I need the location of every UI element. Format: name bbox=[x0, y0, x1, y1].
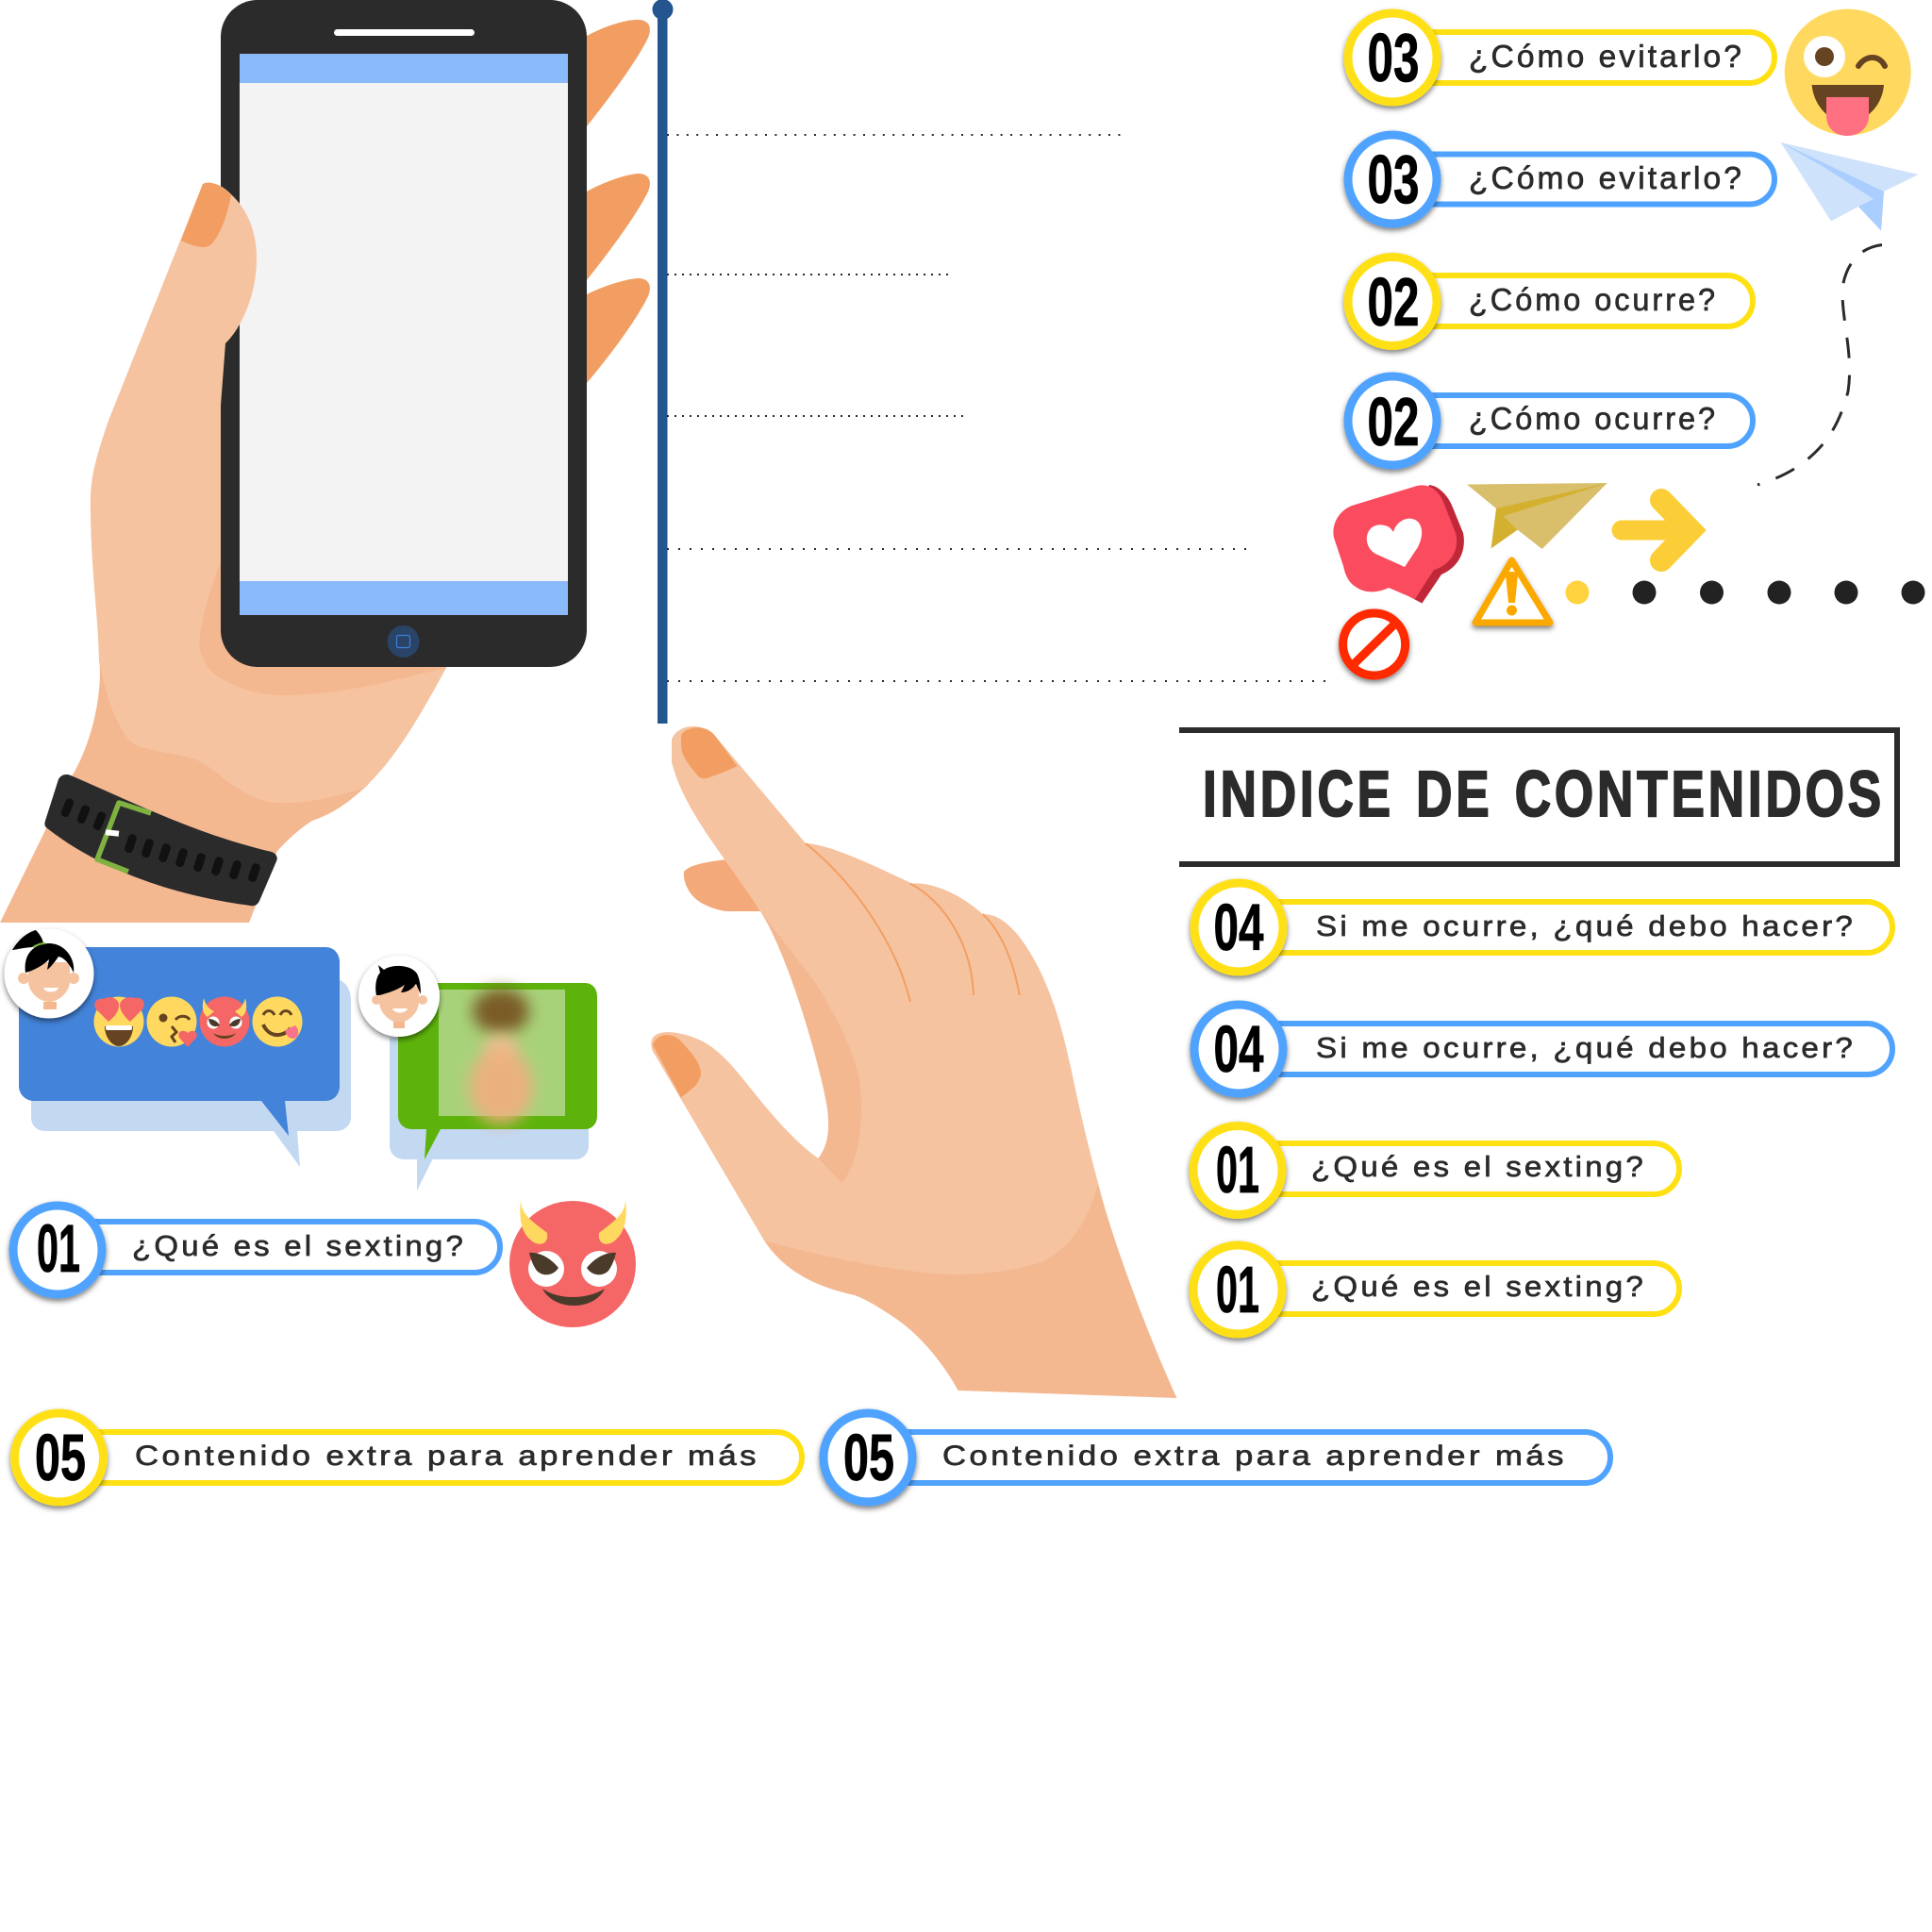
pill: 03 yellow: 03 bbox=[1368, 21, 1419, 96]
pill: 01 yellow second: 01 bbox=[1216, 1253, 1259, 1326]
pill: 01 yellow: 01 bbox=[1216, 1133, 1259, 1207]
chat: woman message bubble bbox=[4, 928, 351, 1167]
pill: 05 yellow bbox=[15, 1413, 802, 1502]
dotted leader lines bbox=[667, 135, 1333, 681]
pill: 03 yellow: ¿Cómo evitarlo? bbox=[1469, 39, 1744, 74]
pill: 01 blue bbox=[13, 1206, 500, 1294]
pill: 04 yellow: 04 bbox=[1213, 891, 1264, 964]
smartphone bbox=[221, 0, 587, 667]
photo blurred bbox=[439, 989, 565, 1124]
icon: yellow arrow bbox=[1622, 500, 1690, 560]
pill: 02 blue: ¿Cómo ocurre? bbox=[1469, 401, 1718, 436]
pill: 01 yellow second: ¿Qué es el sexting? bbox=[1311, 1270, 1646, 1303]
pill: 03 yellow bbox=[1348, 13, 1774, 102]
avatar: woman bbox=[4, 928, 94, 1019]
wristband tab bbox=[106, 829, 119, 837]
emoji: tongue smile bbox=[253, 996, 302, 1047]
index nail bbox=[681, 727, 737, 778]
title box bbox=[1179, 730, 1897, 864]
pill: 02 blue bbox=[1348, 376, 1753, 465]
phone home button bbox=[387, 625, 419, 658]
pill: 03 blue: ¿Cómo evitarlo? bbox=[1469, 160, 1744, 195]
hand holding phone: back fingers bbox=[587, 20, 650, 383]
pill: 04 blue: Si me ocurre, ¿qué debo hacer? bbox=[1316, 1031, 1856, 1064]
thumb nail bbox=[653, 1035, 701, 1098]
vertical timeline bbox=[653, 0, 674, 724]
chat: man photo bubble bbox=[358, 956, 597, 1191]
phone speaker bbox=[334, 29, 475, 36]
pill: 03 blue: 03 bbox=[1368, 142, 1419, 218]
phone screen bbox=[240, 54, 568, 615]
pill: 05 blue: 05 bbox=[843, 1421, 894, 1494]
hand holding phone: palm and wrist bbox=[0, 184, 446, 923]
pill: 04 blue: 04 bbox=[1213, 1012, 1264, 1086]
thumb-index shadow bbox=[760, 911, 861, 1183]
pill: 02 blue: 02 bbox=[1368, 385, 1419, 460]
thumb on phone bbox=[170, 183, 257, 430]
pill: 01 yellow second bbox=[1193, 1245, 1679, 1334]
knuckle lines bbox=[806, 843, 1020, 1002]
pill: 04 yellow: Si me ocurre, ¿qué debo hacer? bbox=[1316, 909, 1856, 942]
phone top bar bbox=[240, 54, 568, 83]
icon: blue paper plane bbox=[1781, 142, 1919, 230]
icon: gold paper plane bbox=[1467, 483, 1607, 549]
pill: 05 blue: Contenido extra para aprender más bbox=[942, 1441, 1567, 1472]
pill: 04 yellow bbox=[1194, 883, 1892, 972]
emoji: wink tongue bbox=[1785, 9, 1911, 136]
emoji: heart eyes bbox=[94, 996, 144, 1047]
progress dots bbox=[1566, 581, 1924, 604]
pill: 01 blue: ¿Qué es el sexting? bbox=[132, 1229, 466, 1262]
pill: 02 yellow bbox=[1348, 257, 1753, 345]
pill: 01 yellow: ¿Qué es el sexting? bbox=[1311, 1150, 1646, 1183]
pill: 01 blue: 01 bbox=[37, 1212, 80, 1287]
pill: 04 blue bbox=[1194, 1005, 1892, 1093]
pill: 03 blue bbox=[1348, 135, 1774, 224]
icon: warning triangle bbox=[1475, 560, 1550, 623]
pill: 02 yellow: ¿Cómo ocurre? bbox=[1469, 282, 1718, 317]
emoji: kiss bbox=[147, 996, 197, 1047]
wristband holes bbox=[60, 797, 261, 883]
blue bubble bbox=[19, 947, 340, 1136]
pill: 05 yellow: Contenido extra para aprender más bbox=[135, 1441, 759, 1472]
bubble shadow bbox=[31, 979, 351, 1167]
wristband buckle bbox=[97, 803, 151, 872]
bubble shadow bbox=[390, 1038, 589, 1191]
icon: prohibition sign bbox=[1343, 613, 1406, 675]
avatar: man bbox=[358, 956, 440, 1037]
green bubble bbox=[398, 983, 597, 1159]
pill: 02 yellow: 02 bbox=[1368, 265, 1419, 341]
dashed flight path bbox=[1757, 245, 1882, 485]
thumb nail bbox=[181, 183, 231, 247]
pill: 05 yellow: 05 bbox=[35, 1421, 86, 1494]
phone bottom bar bbox=[240, 581, 568, 615]
wristband bbox=[44, 774, 277, 906]
icon: heart speech bubble bbox=[1333, 485, 1464, 604]
pill: 01 yellow bbox=[1193, 1126, 1679, 1215]
emoji: large devil bbox=[509, 1201, 636, 1327]
back finger bbox=[684, 859, 760, 911]
emoji: small devil bbox=[200, 996, 249, 1047]
pointing hand bbox=[651, 726, 1177, 1398]
pill: 05 blue bbox=[824, 1413, 1610, 1502]
